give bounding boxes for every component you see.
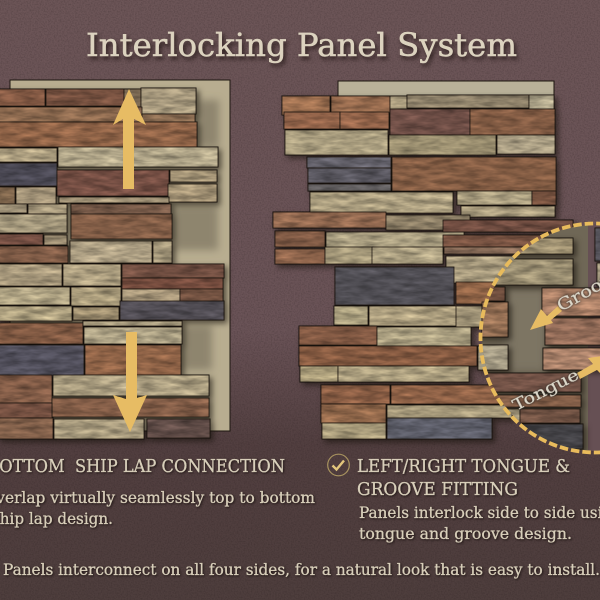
heading: tongue and groove fitting: [357, 456, 570, 500]
footer note: Panels interconnect on all four sides, for a natural look that is easy to install.: [3, 561, 600, 579]
arrow: down: [113, 332, 147, 432]
arrow: up: [113, 89, 146, 189]
panel: left right tongue and groove stone panel: [273, 81, 600, 460]
icon: check circle: [328, 454, 349, 476]
heading: tongue and groove fitting: LEFT/RIGHT TONGUE &: [357, 456, 570, 477]
text: tongue and groove description: [359, 504, 600, 543]
heading: tongue and groove fitting: GROOVE FITTING: [357, 479, 518, 500]
magnifier: tongue and groove detail: [470, 220, 600, 460]
label: tongue: Tongue: [509, 365, 582, 415]
arrow: tongue: [577, 356, 600, 379]
backing board left: [10, 80, 230, 431]
backing board right: [338, 81, 554, 111]
stones right: [273, 95, 576, 439]
dashed circle: [480, 224, 600, 452]
title: Interlocking Panel System: [86, 26, 517, 64]
panel: top and bottom ship lap stone panel: [0, 80, 230, 439]
stones left: [0, 88, 224, 439]
text: ship lap description: [0, 489, 315, 528]
arrow: groove: [530, 306, 562, 330]
text: tongue and groove description: tongue and groove design.: [359, 525, 572, 543]
